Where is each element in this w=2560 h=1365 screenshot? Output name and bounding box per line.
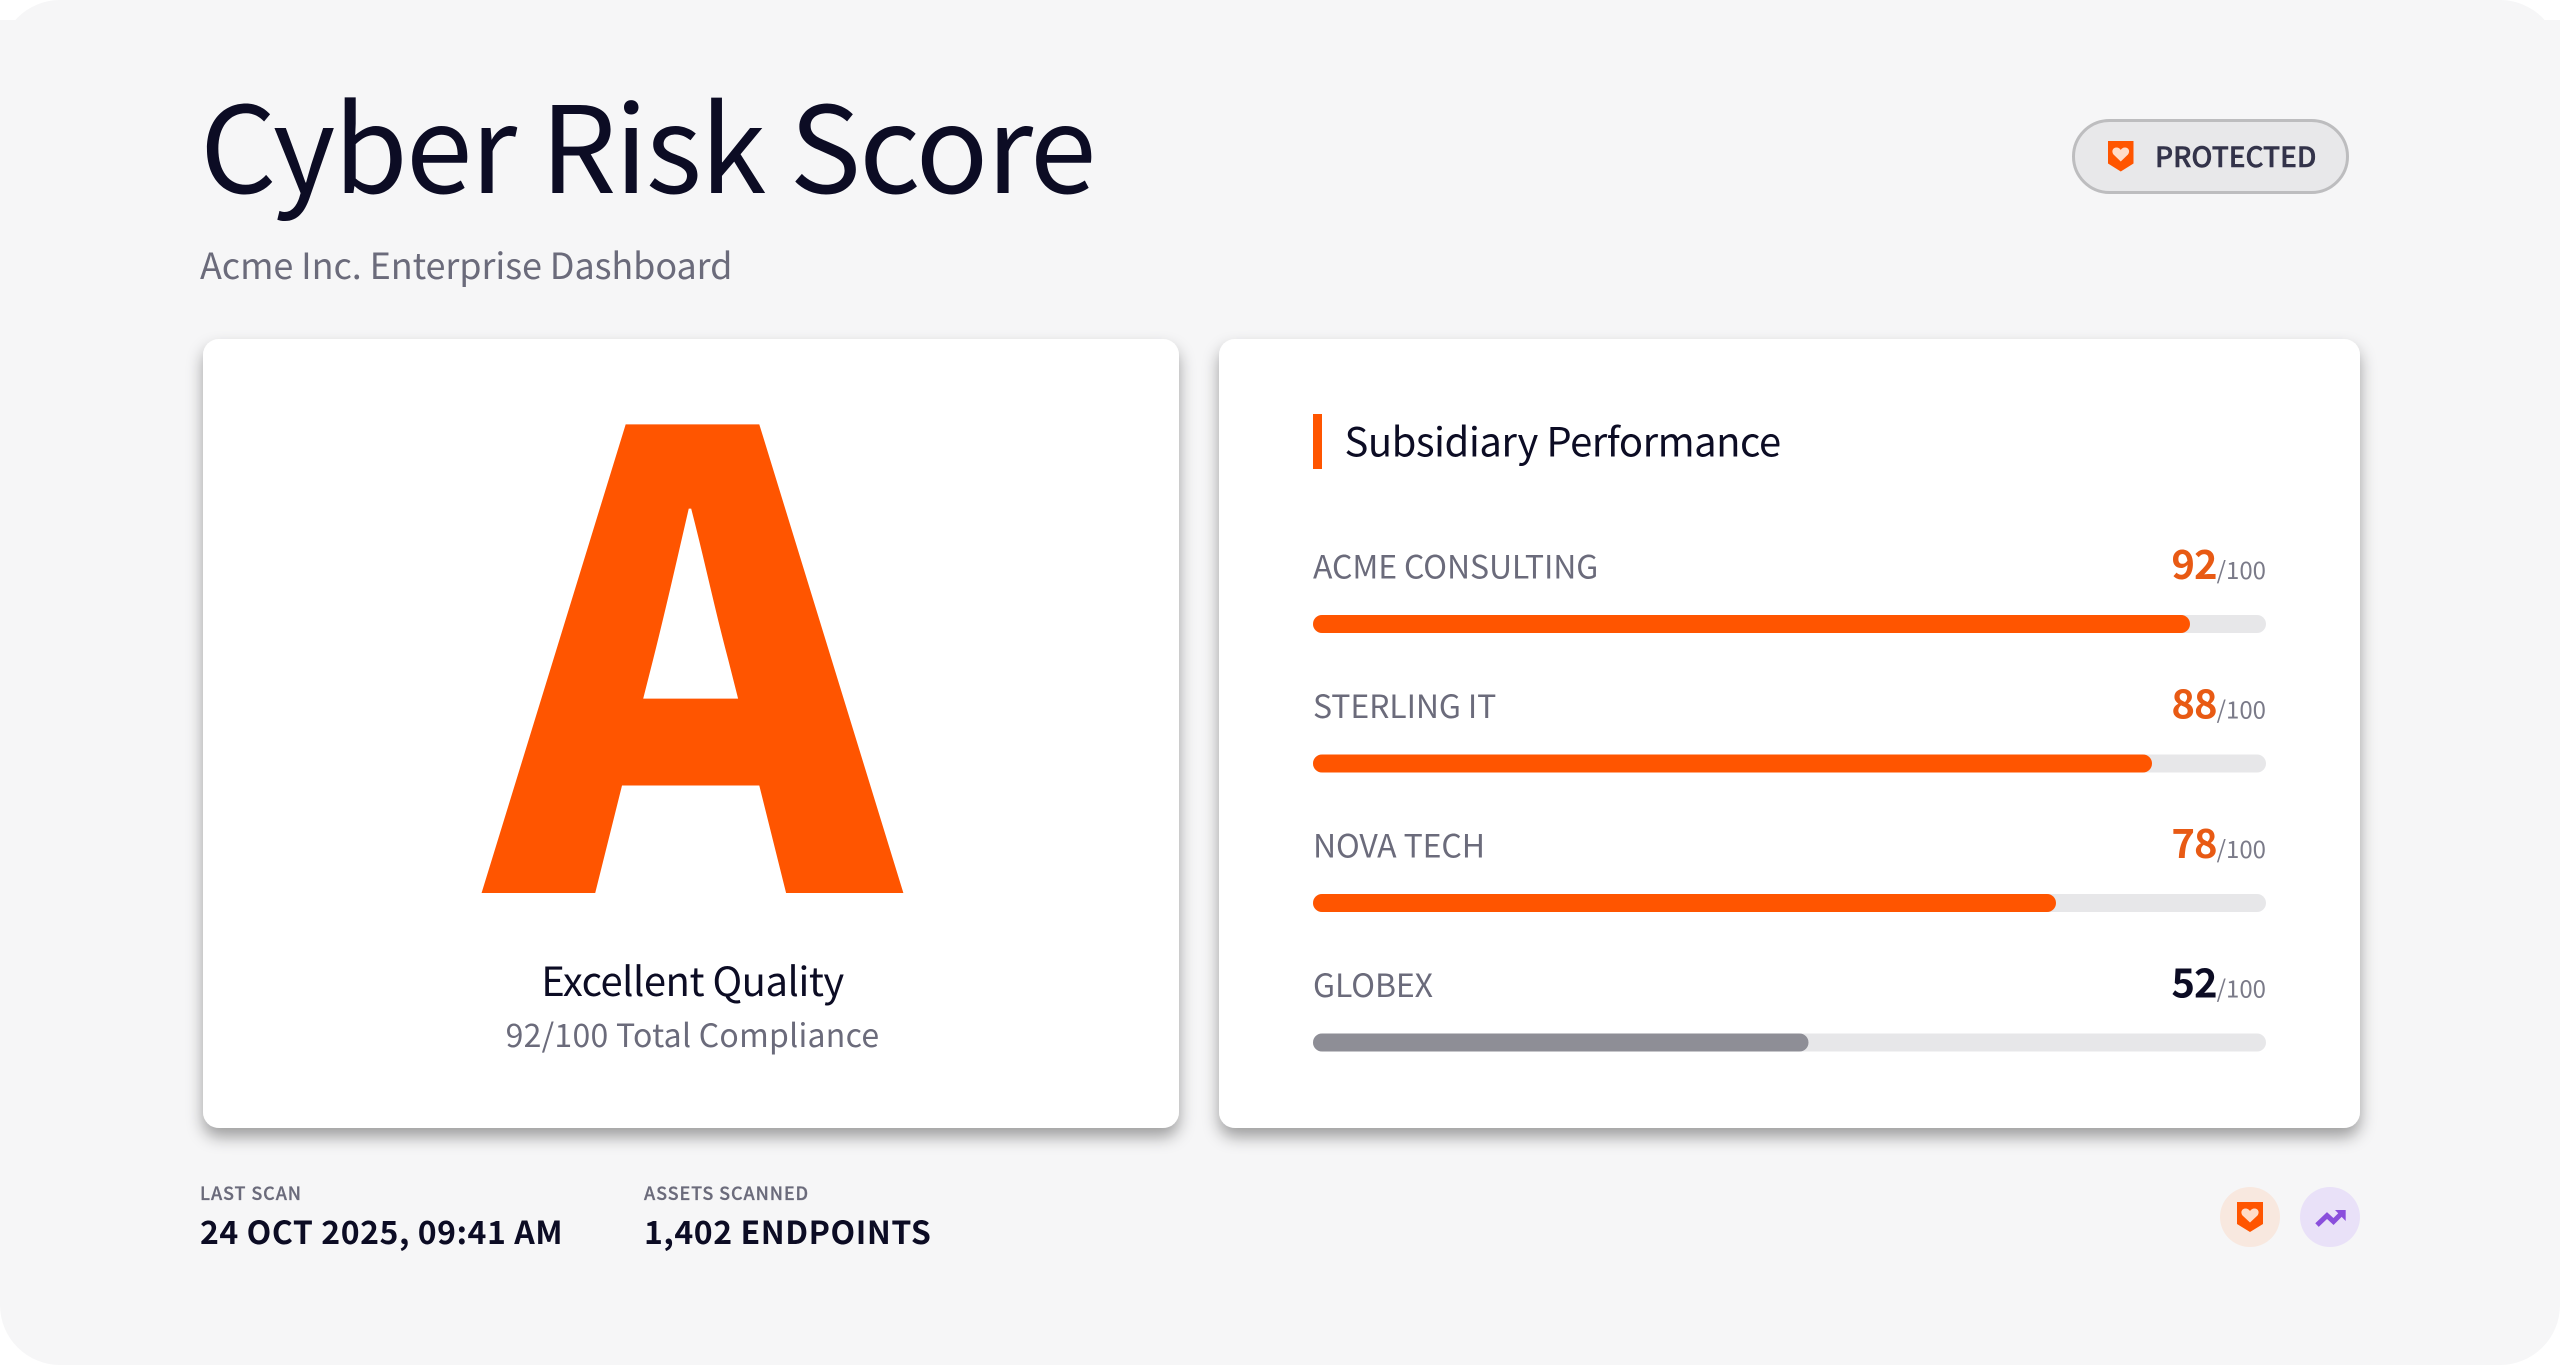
footer stat: last scan	[200, 1180, 563, 1254]
total compliance score: 92/100 Total Compliance	[506, 1011, 879, 1057]
heading accent bar	[1313, 414, 1322, 469]
icon: trending up badge	[2300, 1187, 2360, 1247]
row: Globex: GLOBEX	[1313, 961, 1433, 1007]
row: Nova Tech	[1313, 812, 2266, 912]
panel: overall grade	[203, 164, 1179, 1128]
footer stat: assets scanned: 1,402 ENDPOINTS	[644, 1208, 931, 1254]
icon: shield	[2108, 141, 2134, 172]
panel heading: Subsidiary Performance	[1344, 410, 1781, 468]
grade description: Excellent Quality	[541, 950, 844, 1008]
footer stat: last scan: LAST SCAN	[200, 1180, 302, 1206]
badge label: PROTECTED	[2155, 136, 2316, 176]
title: Cyber Risk Score	[200, 54, 1095, 228]
row: Globex: 52/100	[2171, 952, 2266, 1010]
row: Globex	[1313, 952, 2266, 1052]
row: Acme Consulting	[1313, 533, 2266, 633]
grade letter: A	[477, 164, 906, 1075]
row: Sterling IT	[1313, 672, 2266, 772]
row: Acme Consulting: ACME CONSULTING	[1313, 542, 1598, 588]
icon: shield badge	[2220, 1187, 2280, 1247]
row: Nova Tech: NOVA TECH	[1313, 822, 1485, 868]
footer stat: last scan: 24 OCT 2025, 09:41 AM	[200, 1208, 563, 1254]
status badge: protected	[2074, 120, 2348, 192]
row: Sterling IT: 88/100	[2171, 672, 2266, 730]
row: Acme Consulting: 92/100	[2171, 533, 2266, 591]
footer stat: assets scanned: ASSETS SCANNED	[644, 1180, 809, 1206]
subtitle: Acme Inc. Enterprise Dashboard	[200, 238, 732, 290]
footer stat: assets scanned	[644, 1180, 931, 1254]
row: Sterling IT: STERLING IT	[1313, 682, 1496, 728]
row: Nova Tech: 78/100	[2171, 812, 2266, 870]
panel: subsidiary performance	[1219, 339, 2360, 1128]
